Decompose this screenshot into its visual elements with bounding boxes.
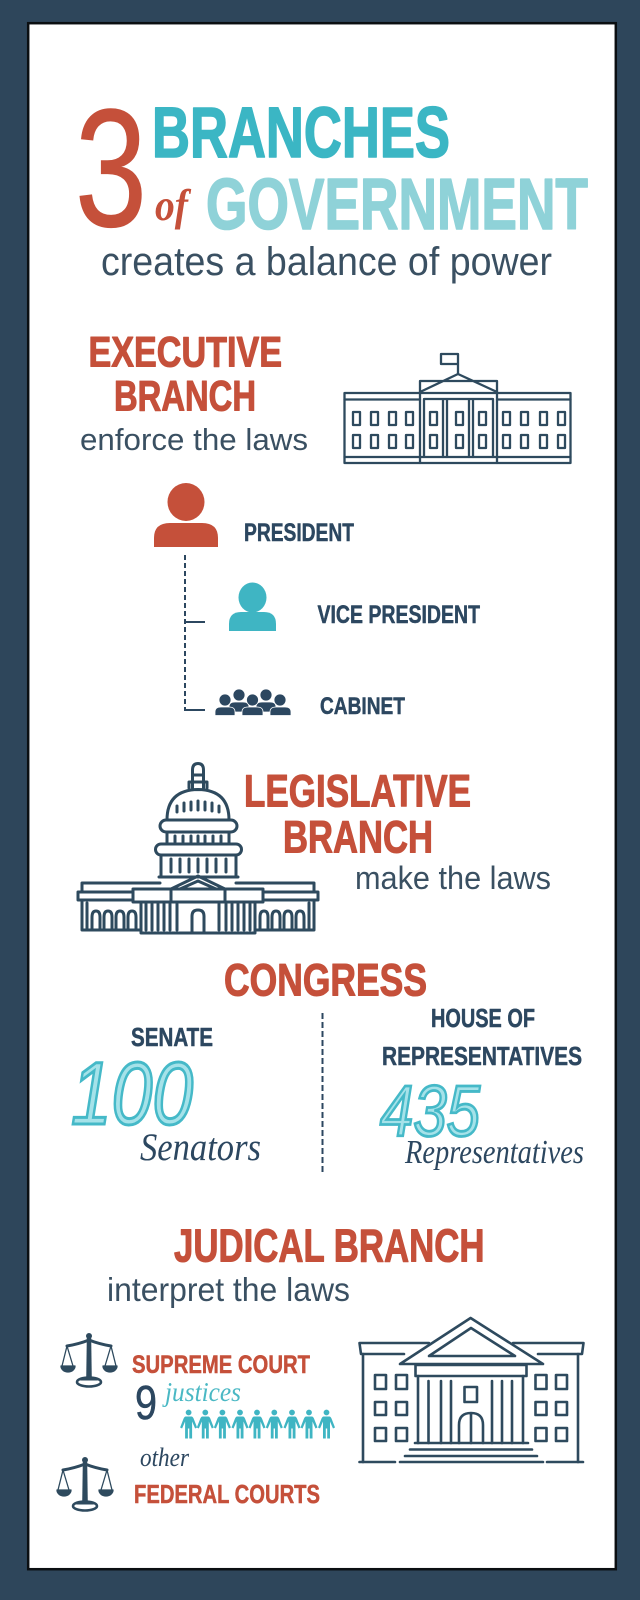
icon: scales supreme court — [61, 1333, 117, 1386]
judicial description: interpret the laws — [107, 1271, 350, 1308]
panel: executive branch heading — [80, 328, 308, 457]
number of justices: 9 — [135, 1377, 157, 1430]
congress heading: CONGRESS — [224, 954, 427, 1006]
house count: 435 — [380, 1072, 481, 1152]
panel: legislative branch heading — [244, 766, 551, 896]
icon: courthouse — [360, 1318, 584, 1462]
senators caption: Senators — [140, 1126, 261, 1169]
judicial heading: JUDICAL BRANCH — [174, 1220, 484, 1272]
legislative heading line one: LEGISLATIVE — [244, 766, 471, 816]
icon: president — [154, 483, 218, 547]
panel: congress — [71, 954, 584, 1175]
icon: nine justices row — [180, 1410, 335, 1438]
justices caption: justices — [162, 1377, 241, 1407]
org chart: executive hierarchy — [154, 483, 480, 720]
house label line one: HOUSE OF — [431, 1005, 535, 1033]
representatives caption: Representatives — [404, 1134, 584, 1171]
house label line two: REPRESENTATIVES — [382, 1043, 582, 1071]
icon: vice president — [229, 582, 276, 631]
icon: cabinet group — [215, 689, 291, 716]
title word of: of — [155, 181, 192, 230]
legislative description: make the laws — [355, 860, 551, 896]
icon: capitol building — [78, 764, 318, 933]
congress divider — [322, 1013, 324, 1175]
label: supreme court: SUPREME COURT — [132, 1351, 310, 1379]
connector lines — [184, 555, 205, 710]
icon: white house — [344, 354, 570, 463]
label: president: PRESIDENT — [244, 519, 354, 547]
executive heading line one: EXECUTIVE — [88, 328, 282, 376]
executive description: enforce the laws — [80, 422, 308, 457]
icon: scales federal courts — [57, 1457, 113, 1510]
label: vice president: VICE PRESIDENT — [318, 601, 480, 629]
title — [75, 74, 588, 284]
subtitle: creates a balance of power — [101, 240, 552, 284]
label: federal courts: FEDERAL COURTS — [134, 1481, 320, 1509]
title numeral 3: 3 — [75, 74, 147, 262]
executive heading line two: BRANCH — [114, 372, 256, 420]
title word branches: BRANCHES — [152, 94, 450, 173]
panel: judicial branch heading — [107, 1220, 484, 1308]
label: cabinet: CABINET — [320, 693, 405, 720]
senate count: 100 — [71, 1043, 193, 1143]
other caption: other — [140, 1443, 190, 1472]
senate label: SENATE — [131, 1024, 213, 1052]
legislative heading line two: BRANCH — [283, 812, 433, 862]
